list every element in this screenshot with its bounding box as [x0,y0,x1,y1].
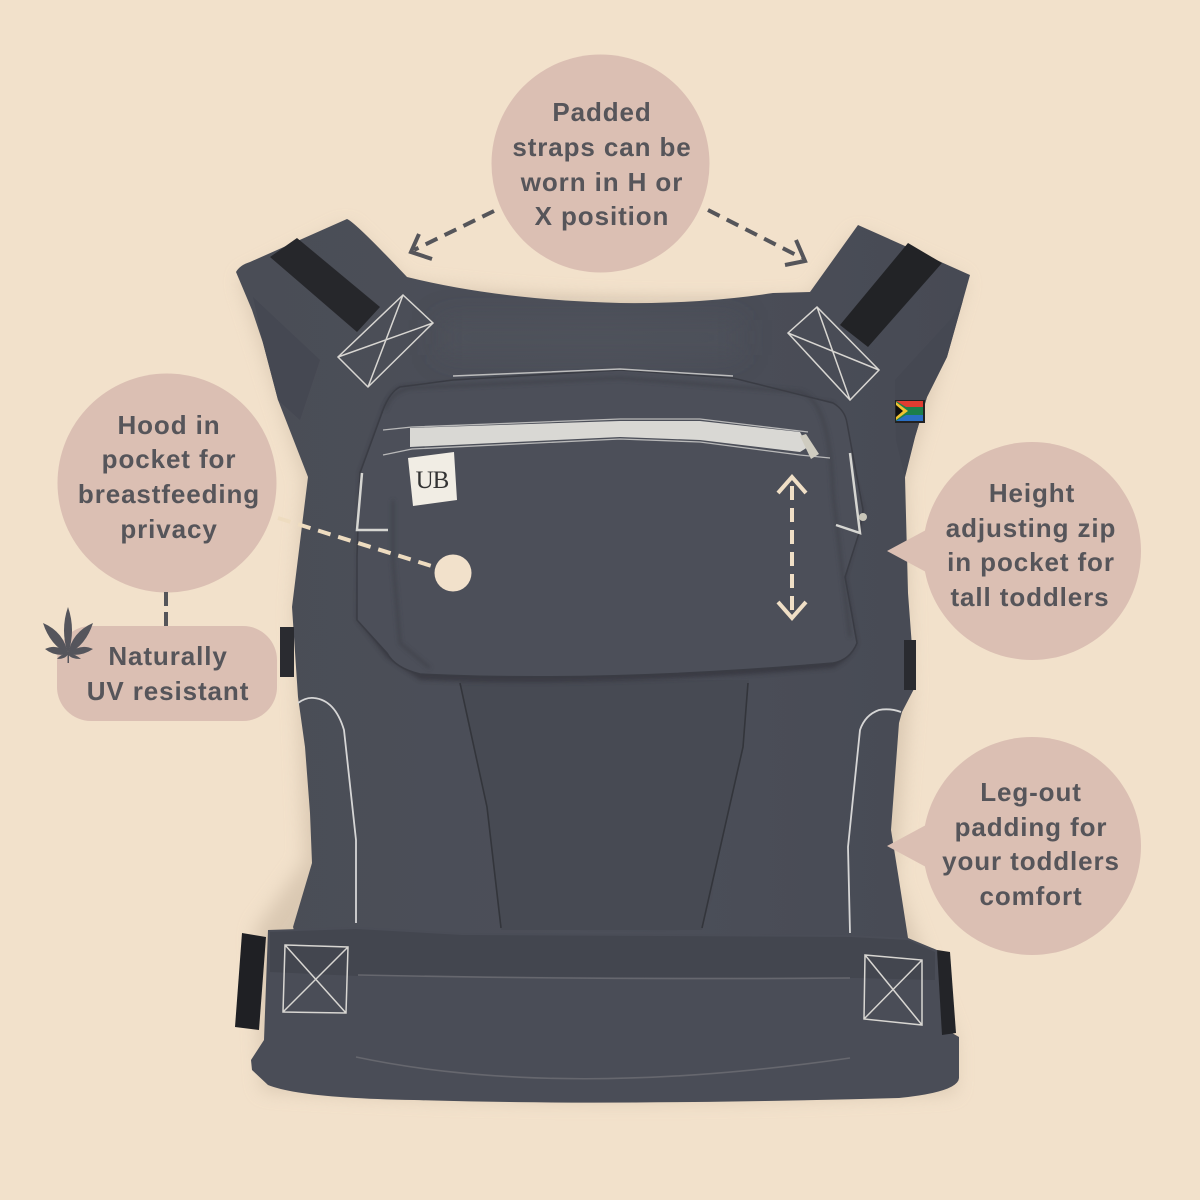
arrow: to right strap [708,210,805,265]
callout: UV resistant: Naturally [108,641,228,671]
carrier soft shadow [240,225,965,1101]
pocket [357,370,863,677]
callout: height adjusting zip: tall toddlers [950,582,1110,612]
callout: leg-out padding: Leg-out [980,777,1082,807]
callout: padded straps: Padded [552,97,652,127]
pocket marker dot [434,554,472,592]
callout: hood in pocket: privacy [120,514,218,544]
callout: leg-out padding: your toddlers [942,846,1120,876]
pocket top stitching [453,369,733,376]
arrow: to left strap [411,211,494,259]
pocket shadow [357,370,863,682]
callout: hood in pocket [58,374,276,592]
callout: height adjusting zip: Height [989,478,1075,508]
double arrow: height adjust [778,477,806,618]
callout: height adjusting zip [887,442,1141,660]
pocket front fold [385,378,850,668]
callout: height adjusting zip: in pocket for [947,547,1115,577]
callout: leg-out padding: padding for [955,812,1107,842]
icon: hemp leaf [43,607,93,663]
waist belt [251,927,959,1103]
belt buckles [235,933,266,1030]
shoulder webbing straps [270,238,380,332]
side zip strips [357,453,860,533]
callout: padded straps: X position [535,201,669,231]
carrier body [236,219,970,950]
callout: padded straps [492,54,710,272]
callout: hood in pocket: pocket for [102,444,236,474]
connector between callouts [164,592,168,626]
zip [410,421,808,452]
stitched patches [283,295,922,1025]
logo label: UB [416,467,449,494]
callout: padded straps: straps can be [512,132,692,162]
callout: padded straps: worn in H or [520,167,683,197]
callout: UV resistant: UV resistant [87,676,249,706]
flag tag [895,400,925,423]
callout: hood in pocket: breastfeeding [78,479,260,509]
callout: UV resistant [57,626,277,721]
logo label [408,452,457,506]
callout: leg-out padding: comfort [979,881,1083,911]
belt upper band [270,929,935,980]
back panel centre [460,680,749,930]
fabric mottling [440,320,740,900]
zip pull [800,434,819,459]
baby carrier [235,219,970,1103]
dashed pointer to pocket marker [278,518,438,568]
callout: hood in pocket: Hood in [117,410,221,440]
strap fold shading [253,297,963,477]
callout: height adjusting zip: adjusting zip [946,513,1116,543]
callout: leg-out padding [887,737,1141,955]
leg padding stitching [298,698,901,933]
